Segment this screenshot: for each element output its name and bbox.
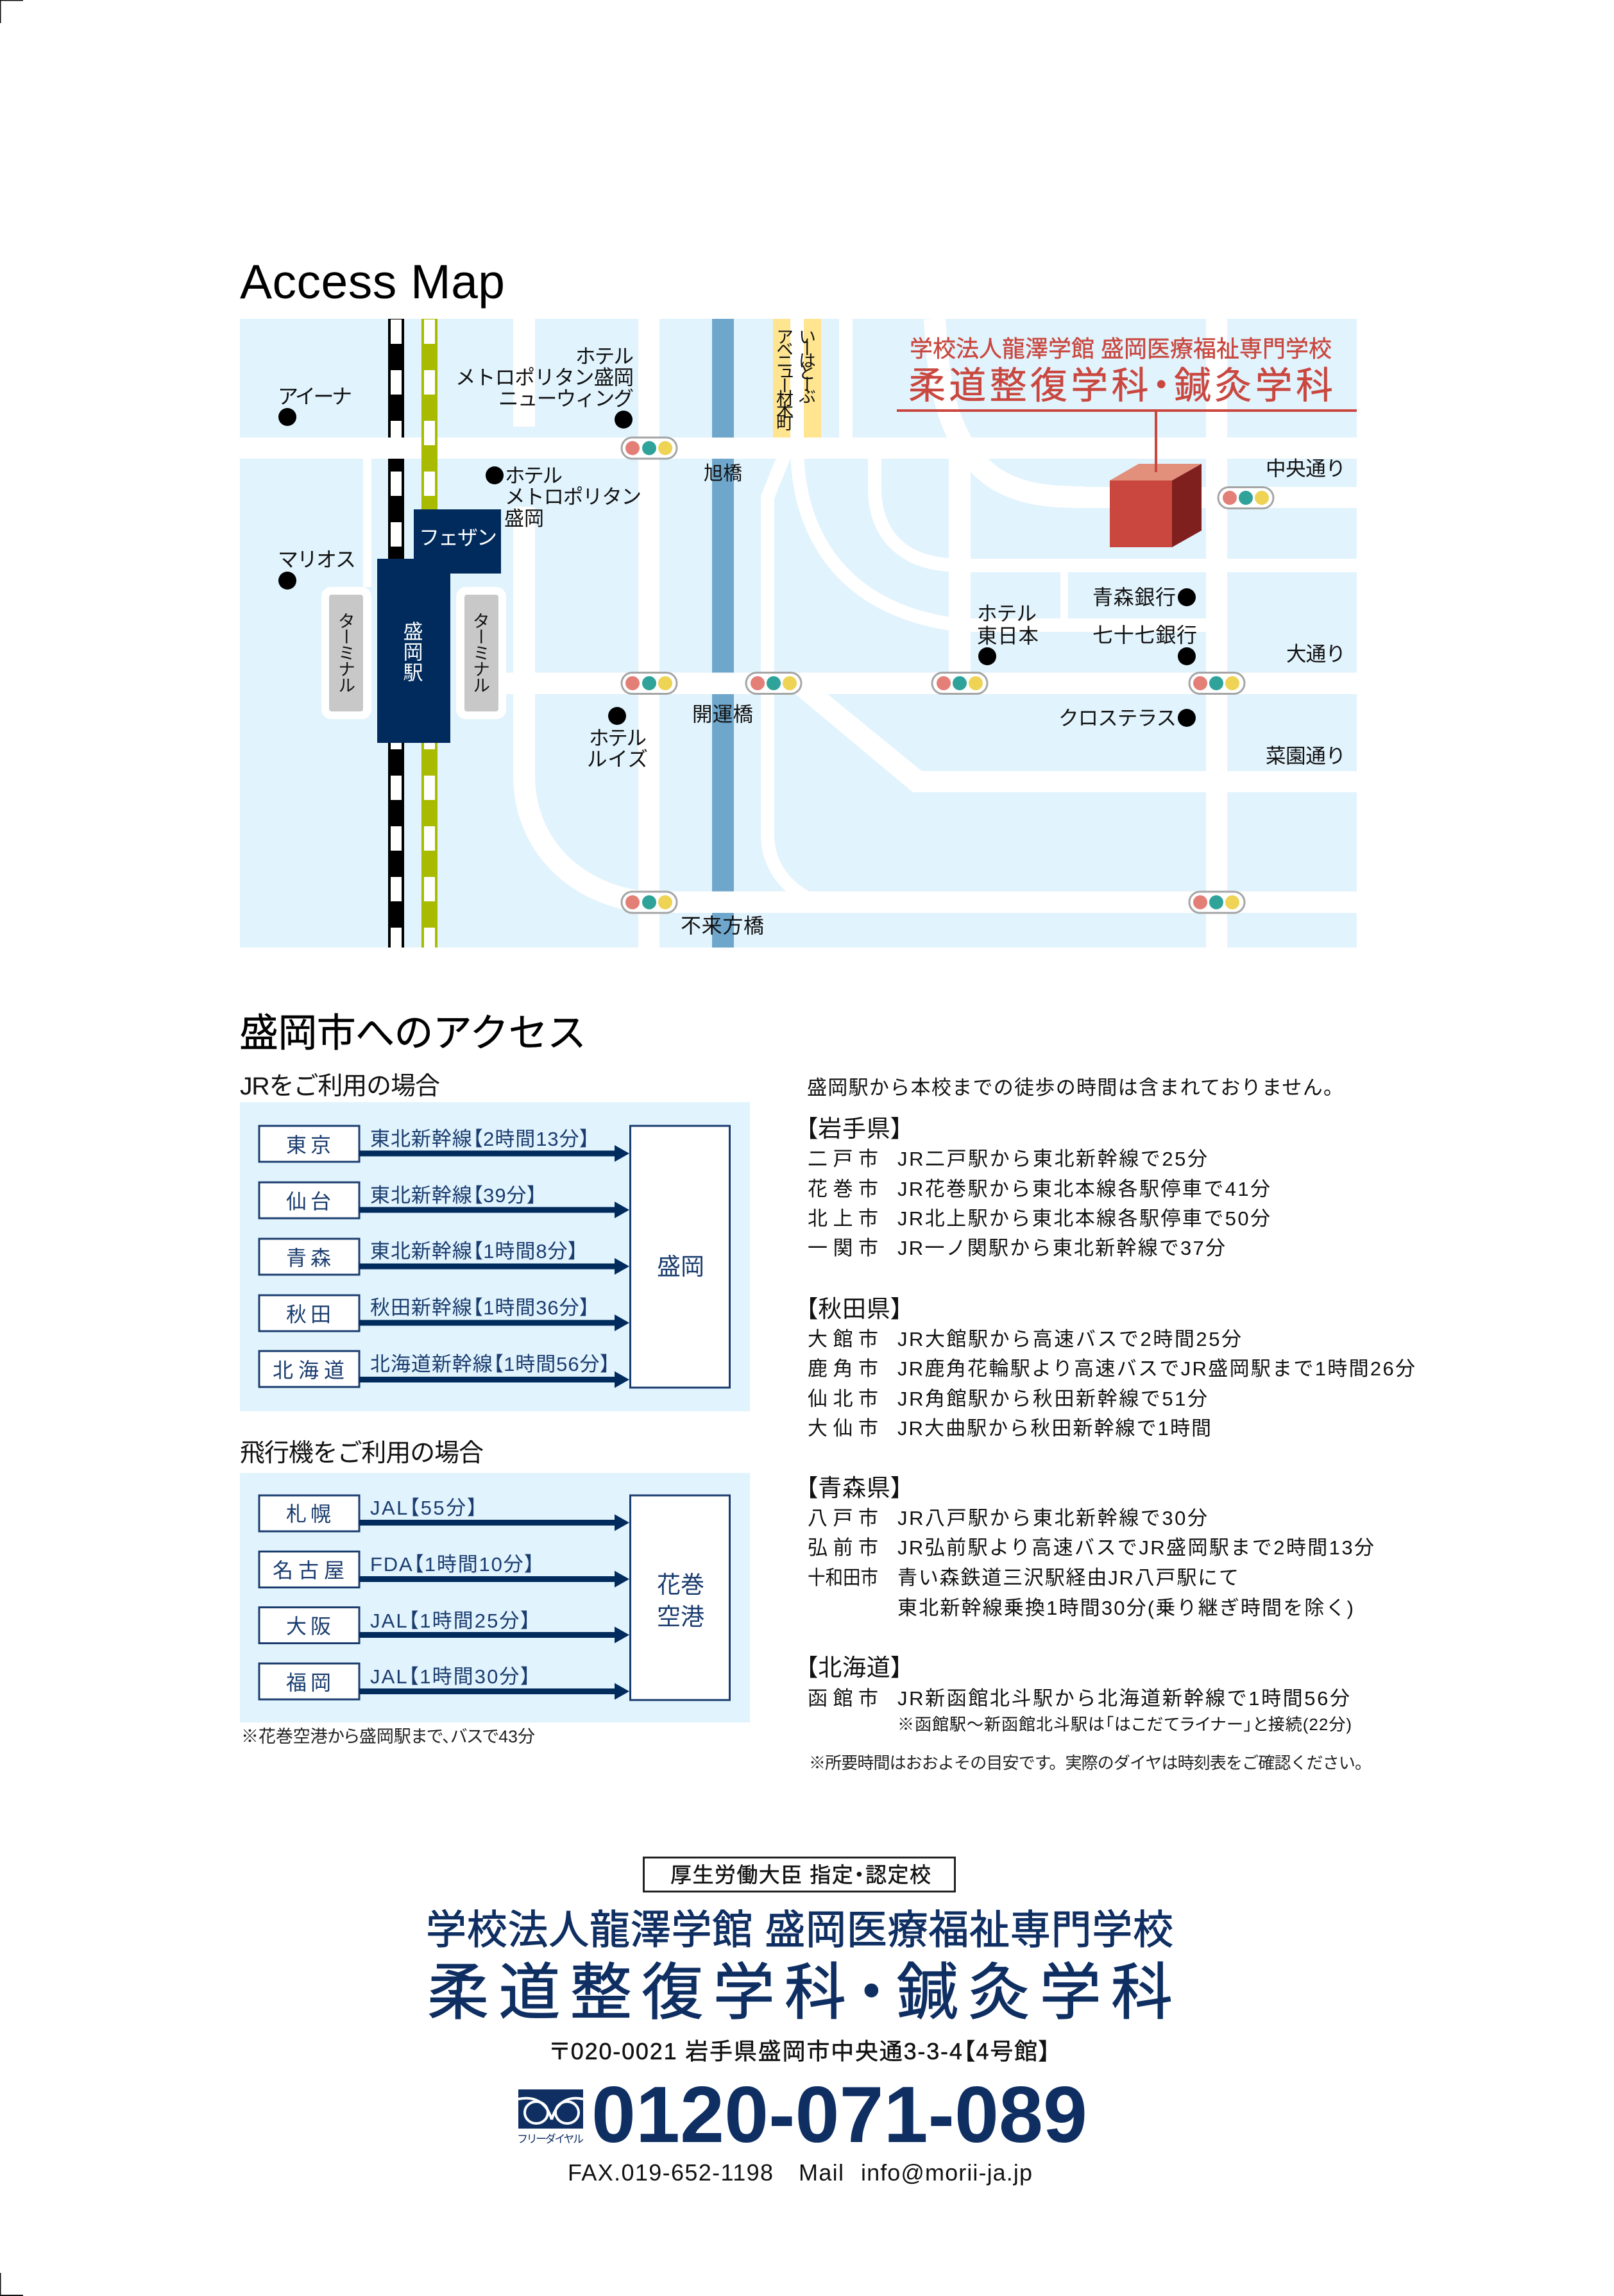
label: Hotel Higashi Nihon: ホテル [977,602,1037,625]
route: Sendai [259,1182,629,1218]
block: Akita prefecture: 鹿角市 [808,1357,878,1380]
label: Hotel Ruiz [587,707,648,770]
badge: ministry designated school [644,1858,955,1891]
river [712,319,734,948]
block: Akita prefecture: 大館市 [808,1328,878,1350]
route: Nagoya: FDA【1時間10分】 [370,1553,534,1576]
route: Sendai: 東北新幹線【39分】 [370,1184,537,1207]
label: Hotel Higashi Nihon [977,602,1039,665]
block: Hokkaido: 函館市 [808,1687,878,1710]
panel: JR routes [240,1102,750,1411]
route: Hokkaido: 北海道 [273,1359,344,1382]
block: Akita prefecture: JR角館駅から秋田新幹線で51分 [897,1388,1207,1410]
subheading: by air: 飛行機をご利用の場合 [240,1440,484,1467]
route: Osaka: 大阪 [286,1615,331,1638]
block: Aomori prefecture: 【青森県】 [806,1475,903,1501]
yellow arcade bands [773,319,821,438]
note: times are approximate: ※所要時間はおおよその目安です。実際のダイヤは時刻表をご確認ください。 [809,1753,1372,1773]
traffic light 7 [622,892,677,913]
block: Aomori prefecture: JR弘前駅より高速バスでJR盛岡駅まで2時間13分 [897,1536,1374,1559]
label: 77 Bank [1092,624,1197,665]
route: Aomori [259,1239,629,1275]
block: Iwate prefecture: JR一ノ関駅から東北新幹線で37分 [897,1237,1225,1259]
fax and mail: info@morii-ja.jp [861,2159,1032,2186]
heading: access to Morioka: 盛岡市へのアクセス [239,1011,586,1055]
label: Hotel Metropolitan Morioka: ホテル [505,464,563,487]
text: walking time note: 盛岡駅から本校までの徒歩の時間は含まれておりません。 [807,1076,1343,1099]
fax and mail [568,2159,1032,2186]
label: Hotel Metropolitan New Wing: ホテル [575,344,634,368]
label: Chuo-dori: 中央通り [1266,457,1346,480]
route: Akita [259,1295,629,1331]
label: Aiina [278,385,352,426]
route: Fukuoka [259,1663,629,1700]
route: Aomori: 東北新幹線【1時間8分】 [370,1240,578,1263]
bus terminal east [456,587,506,719]
route: Sapporo: 札幌 [286,1502,331,1526]
label: Hotel Metropolitan Morioka [486,464,641,530]
block: Aomori prefecture: 青い森鉄道三沢駅経由JR八戸駅にて [897,1567,1239,1589]
block: Hokkaido [806,1654,1352,1734]
block: Iwate prefecture: 二戸市 [808,1148,878,1170]
block: Aomori prefecture: 八戸市 [808,1507,878,1529]
destination box: Morioka [630,1126,730,1388]
block: Iwate prefecture: JR二戸駅から東北新幹線で25分 [897,1148,1207,1170]
school building [1110,464,1202,547]
label: Asahi bridge: 旭橋 [704,463,742,484]
block: Iwate prefecture [806,1116,1270,1259]
block: Hokkaido: JR新函館北斗駅から北海道新幹線で1時間56分 [897,1687,1350,1710]
block: Aomori prefecture: JR八戸駅から東北新幹線で30分 [897,1507,1207,1529]
label: Hotel Metropolitan New Wing: ニューウィング [498,387,634,410]
panel: access map [240,319,1357,948]
traffic light 1 [622,438,677,459]
route: Tokyo: 東京 [286,1134,331,1157]
label: Hotel Metropolitan New Wing [455,344,634,429]
traffic light 8 [1189,892,1244,913]
label: Marios: マリオス [278,548,356,571]
block: Akita prefecture: 大仙市 [808,1417,878,1440]
route: Osaka [259,1608,629,1644]
route: Nagoya [259,1551,629,1587]
block: Iwate prefecture: 一関市 [808,1237,878,1259]
label: Kaiun bridge: 開運橋 [692,702,753,726]
fax and mail: FAX.019-652-1198 [568,2159,773,2186]
route: Fukuoka: 福岡 [286,1671,331,1694]
block: Akita prefecture [806,1296,1415,1440]
school name callout [897,336,1357,472]
phone number: 0120-071-089 [591,2071,1087,2159]
route: Tokyo [259,1126,629,1162]
label: Ihatov: いーはとーぶ [796,328,816,403]
traffic light 6 [1218,488,1273,508]
destination box: Hanamaki Airport: 空港 [657,1604,704,1630]
note: bus from airport: ※花巻空港から盛岡駅まで、バスで43分 [241,1727,535,1746]
bus terminal west [321,587,371,719]
label: Hotel Higashi Nihon: 東日本 [977,624,1039,647]
block: Iwate prefecture: 【岩手県】 [806,1116,903,1142]
block: Akita prefecture: 【秋田県】 [806,1296,903,1322]
label: Kozukata bridge: 不来方橋 [681,914,764,937]
block: Hokkaido: ※函館駅〜新函館北斗駅は「はこだてライナー」と接続(22分) [897,1715,1352,1734]
route: Hokkaido [259,1351,629,1388]
label: Cross Terrace: クロステラス [1058,706,1177,729]
block: Iwate prefecture: JR北上駅から東北本線各駅停車で50分 [897,1207,1270,1230]
footer department name: 柔道整復学科・鍼灸学科 [427,1959,1173,2027]
block: Akita prefecture: JR鹿角花輪駅より高速バスでJR盛岡駅まで1時間26分 [897,1357,1415,1380]
route: Osaka: JAL【1時間25分】 [370,1610,531,1632]
Morioka station and Fezan building: フェザン [419,526,497,549]
crop marks [0,0,23,2296]
block: Iwate prefecture: 北上市 [808,1207,878,1230]
label: Aomori Bank: 青森銀行 [1092,586,1176,609]
label: Hotel Metropolitan New Wing: メトロポリタン盛岡 [455,366,634,389]
route: Sendai: 仙台 [286,1190,331,1213]
block: Aomori prefecture: 東北新幹線乗換1時間30分(乗り継ぎ時間を除く) [897,1597,1354,1619]
fax and mail: Mail [799,2159,844,2186]
black railway line [388,319,404,948]
block: Aomori prefecture: 弘前市 [808,1536,878,1559]
route: Sapporo [259,1495,629,1531]
traffic light 4 [932,672,987,694]
label: 77 Bank: 七十七銀行 [1092,624,1197,647]
school name callout: 学校法人龍澤学館 盛岡医療福祉専門学校 [910,336,1332,362]
icon: free dial [517,2089,584,2145]
label: Hotel Metropolitan Morioka: メトロポリタン [505,485,641,508]
route: Akita: 秋田新幹線【1時間36分】 [370,1297,590,1319]
label: Avenue Zaimokucho: アベニュー材木町 [774,328,793,431]
block: Akita prefecture: 仙北市 [808,1388,878,1410]
badge: ministry designated school: 厚生労働大臣 指定・認定校 [670,1863,931,1887]
label: O-dori: 大通り [1286,642,1346,665]
subheading: by JR: JRをご利用の場合 [240,1073,440,1100]
route: Fukuoka: JAL【1時間30分】 [370,1665,531,1688]
school name callout: 柔道整復学科・鍼灸学科 [908,365,1333,407]
address: 〒020-0021 岩手県盛岡市中央通3-3-4【4号館】 [550,2038,1050,2064]
traffic light 3 [746,672,801,694]
footer school name: 学校法人龍澤学館 盛岡医療福祉専門学校 [426,1908,1173,1953]
title: Access Map: Access Map [240,255,505,309]
label: Marios [278,548,356,590]
block: Aomori prefecture: 十和田市 [808,1567,878,1589]
route: Aomori: 青森 [286,1246,331,1270]
Morioka station and Fezan building [377,509,501,743]
traffic light 2 [622,672,677,694]
label: Saien-dori: 菜園通り [1266,744,1346,767]
route: Hokkaido: 北海道新幹線【1時間56分】 [370,1353,610,1375]
route: Nagoya: 名古屋 [273,1559,344,1582]
roads [240,319,1357,948]
block: Aomori prefecture [806,1475,1374,1619]
block: Iwate prefecture: JR花巻駅から東北本線各駅停車で41分 [897,1178,1270,1200]
label: Hotel Ruiz: ホテル [589,726,647,749]
panel: flight routes [240,1473,750,1722]
route: Sapporo: JAL【55分】 [370,1497,477,1519]
label: Hotel Ruiz: ルイズ [587,747,648,770]
green railway line [421,319,437,948]
route: Akita: 秋田 [286,1303,331,1326]
label: Hotel Metropolitan Morioka: 盛岡 [504,507,544,530]
block: Akita prefecture: JR大館駅から高速バスで2時間25分 [897,1328,1241,1350]
Morioka station and Fezan building: 盛岡駅 [400,621,423,683]
label: Aiina: アイーナ [278,385,352,408]
block: Hokkaido: 【北海道】 [806,1654,903,1681]
block: Akita prefecture: JR大曲駅から秋田新幹線で1時間 [897,1417,1211,1440]
destination box: Hanamaki Airport [630,1495,730,1700]
block: Iwate prefecture: 花巻市 [808,1178,878,1200]
destination box: Hanamaki Airport: 花巻 [657,1572,704,1598]
icon: free dial: フリーダイヤル [517,2133,584,2145]
bus terminal west: ターミナル [336,612,355,692]
destination box: Morioka: 盛岡 [657,1254,704,1280]
traffic light 5 [1189,672,1244,694]
route: Tokyo: 東北新幹線【2時間13分】 [370,1128,590,1150]
bus terminal east: ターミナル [470,612,489,692]
